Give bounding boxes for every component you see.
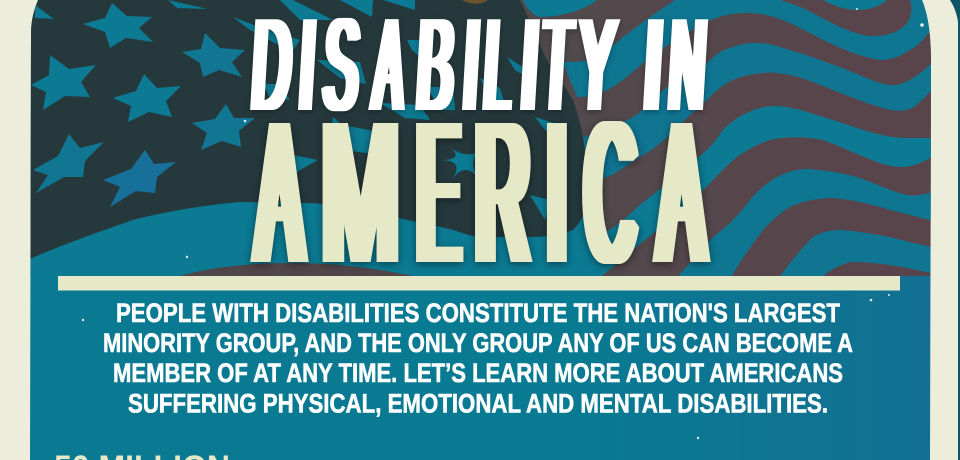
intro paragraph: SUFFERING PHYSICAL, EMOTIONAL AND MENTAL DISABILITIES. — [128, 388, 828, 418]
canton — [0, 0, 585, 270]
divider bar — [58, 276, 900, 290]
title line 2: AMERICA: E — [418, 79, 459, 305]
title line 2: AMERICA: I — [548, 79, 566, 305]
title line 2: AMERICA: R — [476, 80, 529, 306]
intro paragraph: PEOPLE WITH DISABILITIES CONSTITUTE THE NATION'S LARGEST — [116, 298, 840, 328]
intro paragraph — [103, 298, 853, 418]
brown arc — [180, 263, 413, 276]
title line 2: AMERICA: A — [257, 80, 302, 305]
top medallion hint — [462, 0, 488, 4]
flag stripes — [0, 0, 960, 276]
title line 2: AMERICA: C — [586, 80, 635, 305]
title line 1: DISABILITY IN — [249, 0, 709, 139]
right edge strip — [950, 0, 960, 460]
canton stars — [31, 0, 563, 220]
title line 2: AMERICA: M — [322, 81, 399, 306]
title line 2: AMERICA: A — [659, 80, 704, 305]
title line 2: AMERICA — [257, 79, 704, 306]
